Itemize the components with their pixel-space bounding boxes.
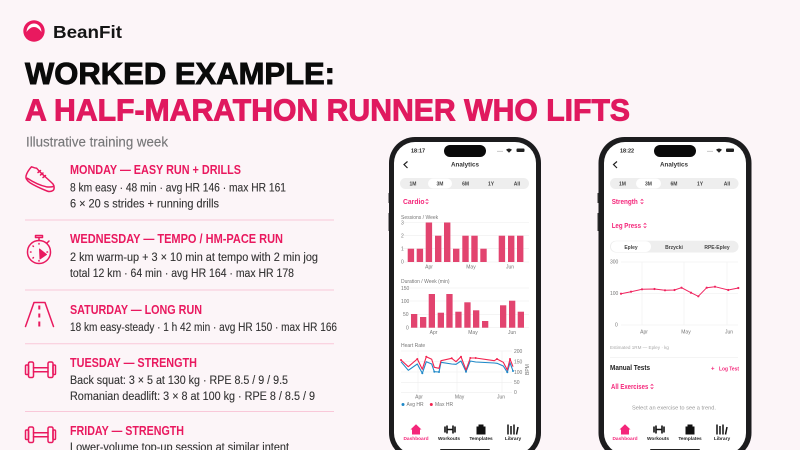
tab bar: Templates (678, 436, 702, 442)
status bar: 18:22 (620, 148, 634, 154)
icon: road (26, 302, 54, 326)
phone: cardio analytics (388, 137, 541, 450)
subtitle: Illustrative training week (26, 134, 168, 150)
panel: Friday session (26, 423, 290, 450)
manual tests section: + (711, 366, 715, 372)
panel: Wednesday session (28, 231, 318, 280)
nav header: Analytics (451, 162, 479, 168)
panel: Monday session: 6 × 20 s strides + running drills (70, 196, 219, 210)
panel: Saturday session: SATURDAY — LONG RUN (70, 302, 202, 317)
formula selector: Brzycki (665, 245, 684, 251)
time range selector: All (514, 182, 521, 188)
panel: Tuesday session (26, 355, 315, 403)
chart: heart rate: Heart Rate (401, 343, 425, 349)
formula selector: Epley (624, 245, 638, 251)
icon: running shoe (26, 167, 54, 192)
chart: duration per week: May (468, 330, 478, 336)
nav header: Analytics (660, 162, 688, 168)
manual tests section: Manual Tests (610, 365, 650, 372)
time range selector (610, 178, 738, 189)
icon: stopwatch (28, 236, 50, 264)
panel: Tuesday session: Romanian deadlift: 3 × 8 at 100 kg · RPE 8 / 8.5 / 9 (70, 389, 315, 403)
chart: sessions per week: 2 (401, 234, 404, 240)
tab bar (612, 424, 730, 450)
panel: Monday session (26, 162, 286, 210)
chart: heart rate: 200 (514, 349, 523, 355)
chart: estimated 1RM: May (681, 330, 691, 336)
chart: duration per week: 100 (401, 299, 410, 305)
tab bar: Workouts (647, 436, 669, 442)
time range selector: All (724, 182, 731, 188)
time range selector (400, 178, 529, 189)
manual tests section: All Exercises (611, 382, 648, 391)
tab bar (403, 424, 521, 450)
manual tests section (610, 365, 739, 412)
chart: heart rate (400, 343, 531, 408)
chart: estimated 1RM: 300 (610, 260, 619, 266)
panel: Wednesday session: total 12 km · 64 min · avg HR 164 · max HR 178 (70, 266, 294, 280)
chart: heart rate: BPM (525, 364, 531, 375)
chart: heart rate: Apr (415, 394, 423, 400)
formula selector: RPE-Epley (704, 245, 730, 251)
chart: estimated 1RM: 100 (610, 291, 619, 297)
panel: Monday session: 8 km easy · 48 min · avg HR 146 · max HR 161 (70, 180, 286, 194)
logo: BeanFit: BeanFit (53, 22, 122, 42)
chart: estimated 1RM: Estimated 1RM — Epley · kg (610, 345, 669, 350)
chart: sessions per week: May (466, 264, 476, 270)
manual tests section: Select an exercise to see a trend. (632, 406, 716, 412)
chart: sessions per week: 1 (401, 246, 404, 252)
panel: Tuesday session: TUESDAY — STRENGTH (70, 355, 197, 370)
chart: estimated 1RM: Apr (640, 330, 648, 336)
status bar (620, 145, 734, 157)
phone: strength analytics (598, 137, 752, 450)
chart: estimated 1RM: Jun (725, 330, 733, 336)
selector: Strength: Strength (612, 197, 638, 206)
title: WORKED EXAMPLE: (25, 56, 335, 91)
time range selector: 1M (619, 182, 626, 188)
selector: Leg Press: Leg Press (612, 221, 641, 230)
panel: Monday session: MONDAY — EASY RUN + DRILLS (70, 162, 241, 177)
title (25, 56, 630, 128)
panel: Wednesday session: 2 km warm-up + 3 × 10 min at tempo with 2 min jog (70, 250, 318, 264)
time range selector: 1M (410, 182, 416, 188)
chart: heart rate: Max HR (435, 402, 453, 408)
chart: heart rate: 100 (514, 370, 523, 376)
logo: BeanFit (23, 20, 122, 42)
chart: duration per week: Duration / Week (min) (401, 279, 450, 285)
manual tests section: Log Test (719, 366, 739, 372)
nav header (614, 162, 688, 168)
selector: Cardio: Cardio (403, 197, 425, 206)
chart: sessions per week: Sessions / Week (401, 215, 439, 221)
chart: heart rate: Jun (497, 394, 505, 400)
time range selector: 1Y (488, 182, 495, 188)
chart: duration per week: 50 (403, 312, 409, 318)
chart: heart rate: Avg HR (406, 402, 424, 408)
title: A HALF-MARATHON RUNNER WHO LIFTS (25, 92, 630, 128)
panel: Wednesday session: WEDNESDAY — TEMPO / HM-PACE RUN (70, 231, 283, 246)
icon: dumbbell (26, 427, 56, 442)
chart: duration per week: 0 (406, 326, 409, 332)
nav header (404, 162, 479, 168)
panel: Saturday session (26, 302, 337, 334)
chart: heart rate: 150 (514, 360, 523, 366)
chart: estimated 1RM: 0 (615, 322, 618, 328)
status bar (411, 145, 524, 157)
chart: duration per week: Apr (430, 330, 438, 336)
panel: Tuesday session: Back squat: 3 × 5 at 130 kg · RPE 8.5 / 9 / 9.5 (70, 373, 288, 387)
chart: heart rate: May (455, 394, 465, 400)
time range selector: 6M (462, 182, 469, 188)
chart: heart rate: 0 (514, 390, 517, 396)
chart: sessions per week: 0 (401, 260, 404, 266)
status bar: 18:17 (411, 148, 425, 154)
chart: heart rate: 50 (514, 380, 520, 386)
panel: Saturday session: 18 km easy-steady · 1 h 42 min · avg HR 150 · max HR 166 (70, 320, 337, 334)
chart: sessions per week: 3 (401, 220, 404, 226)
chart: sessions per week: Apr (425, 264, 433, 270)
chart: duration per week: Jun (508, 330, 516, 336)
chart: sessions per week (401, 215, 529, 270)
formula selector (610, 241, 738, 252)
panel: Friday session: FRIDAY — STRENGTH (70, 423, 184, 438)
chart: duration per week: 150 (401, 286, 410, 292)
chart: duration per week (401, 279, 529, 336)
tab bar: Dashboard (403, 436, 429, 442)
chart: estimated 1RM (610, 260, 739, 350)
tab bar: Workouts (438, 436, 460, 442)
time range selector: 1Y (697, 182, 704, 188)
tab bar: Templates (469, 436, 493, 442)
tab bar: Dashboard (612, 436, 638, 442)
time range selector: 3M (437, 182, 443, 188)
time range selector: 6M (671, 182, 677, 188)
icon: dumbbell (26, 362, 56, 378)
chart: sessions per week: Jun (506, 264, 514, 270)
tab bar: Library (714, 436, 730, 442)
tab bar: Library (505, 436, 521, 442)
time range selector: 3M (645, 182, 652, 188)
